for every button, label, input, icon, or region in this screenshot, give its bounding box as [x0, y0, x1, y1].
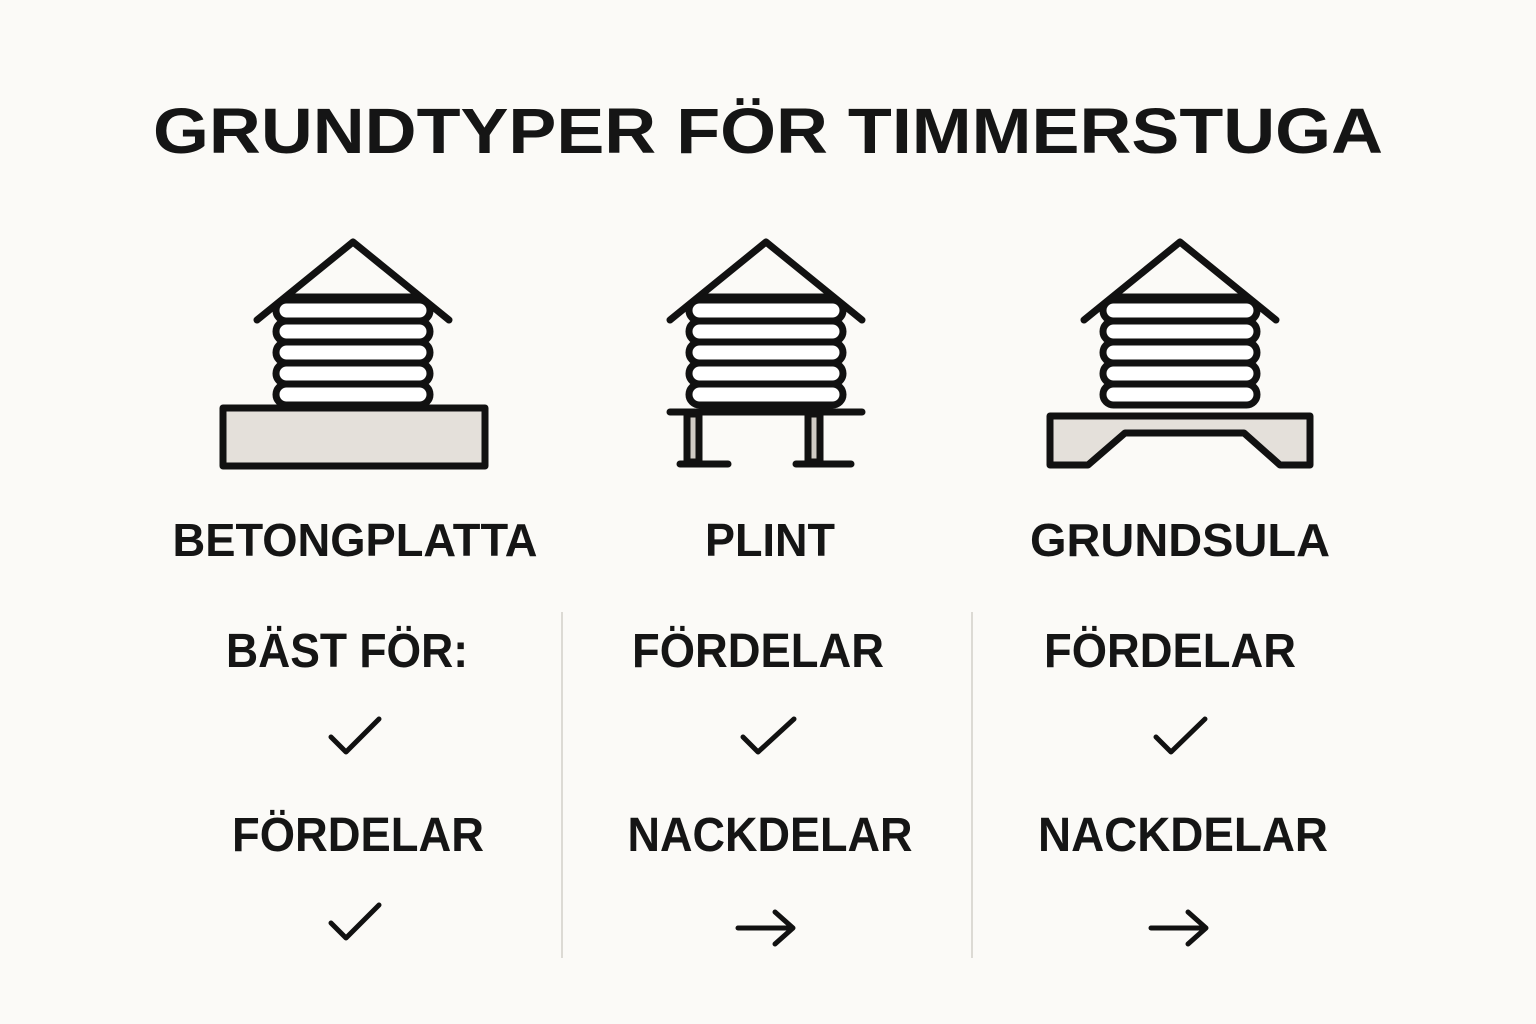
- column 3 text: FÖRDELAR: [1044, 625, 1296, 678]
- column 3 text: NACKDELAR: [1038, 809, 1328, 862]
- column 2 text: NACKDELAR: [628, 809, 912, 862]
- label: Betongplatta: BETONGPLATTA: [172, 514, 538, 566]
- icon: house on strip footing: [1050, 242, 1310, 465]
- icon: house on concrete slab: [223, 242, 485, 466]
- icons: checkmarks and arrows: [331, 719, 1206, 944]
- column 2 text: FÖRDELAR: [632, 625, 884, 678]
- column 3 text: [1038, 625, 1328, 862]
- column 1 text: BÄST FÖR:: [226, 625, 468, 678]
- label: Grundsula: GRUNDSULA: [1030, 514, 1330, 566]
- column 1 text: FÖRDELAR: [232, 809, 484, 862]
- icon: house on plinths: [670, 242, 862, 464]
- label: Plint: PLINT: [705, 514, 835, 566]
- column 1 text: [226, 625, 484, 862]
- column 2 text: [628, 625, 912, 862]
- title: GRUNDTYPER FÖR TIMMERSTUGA: [153, 95, 1383, 167]
